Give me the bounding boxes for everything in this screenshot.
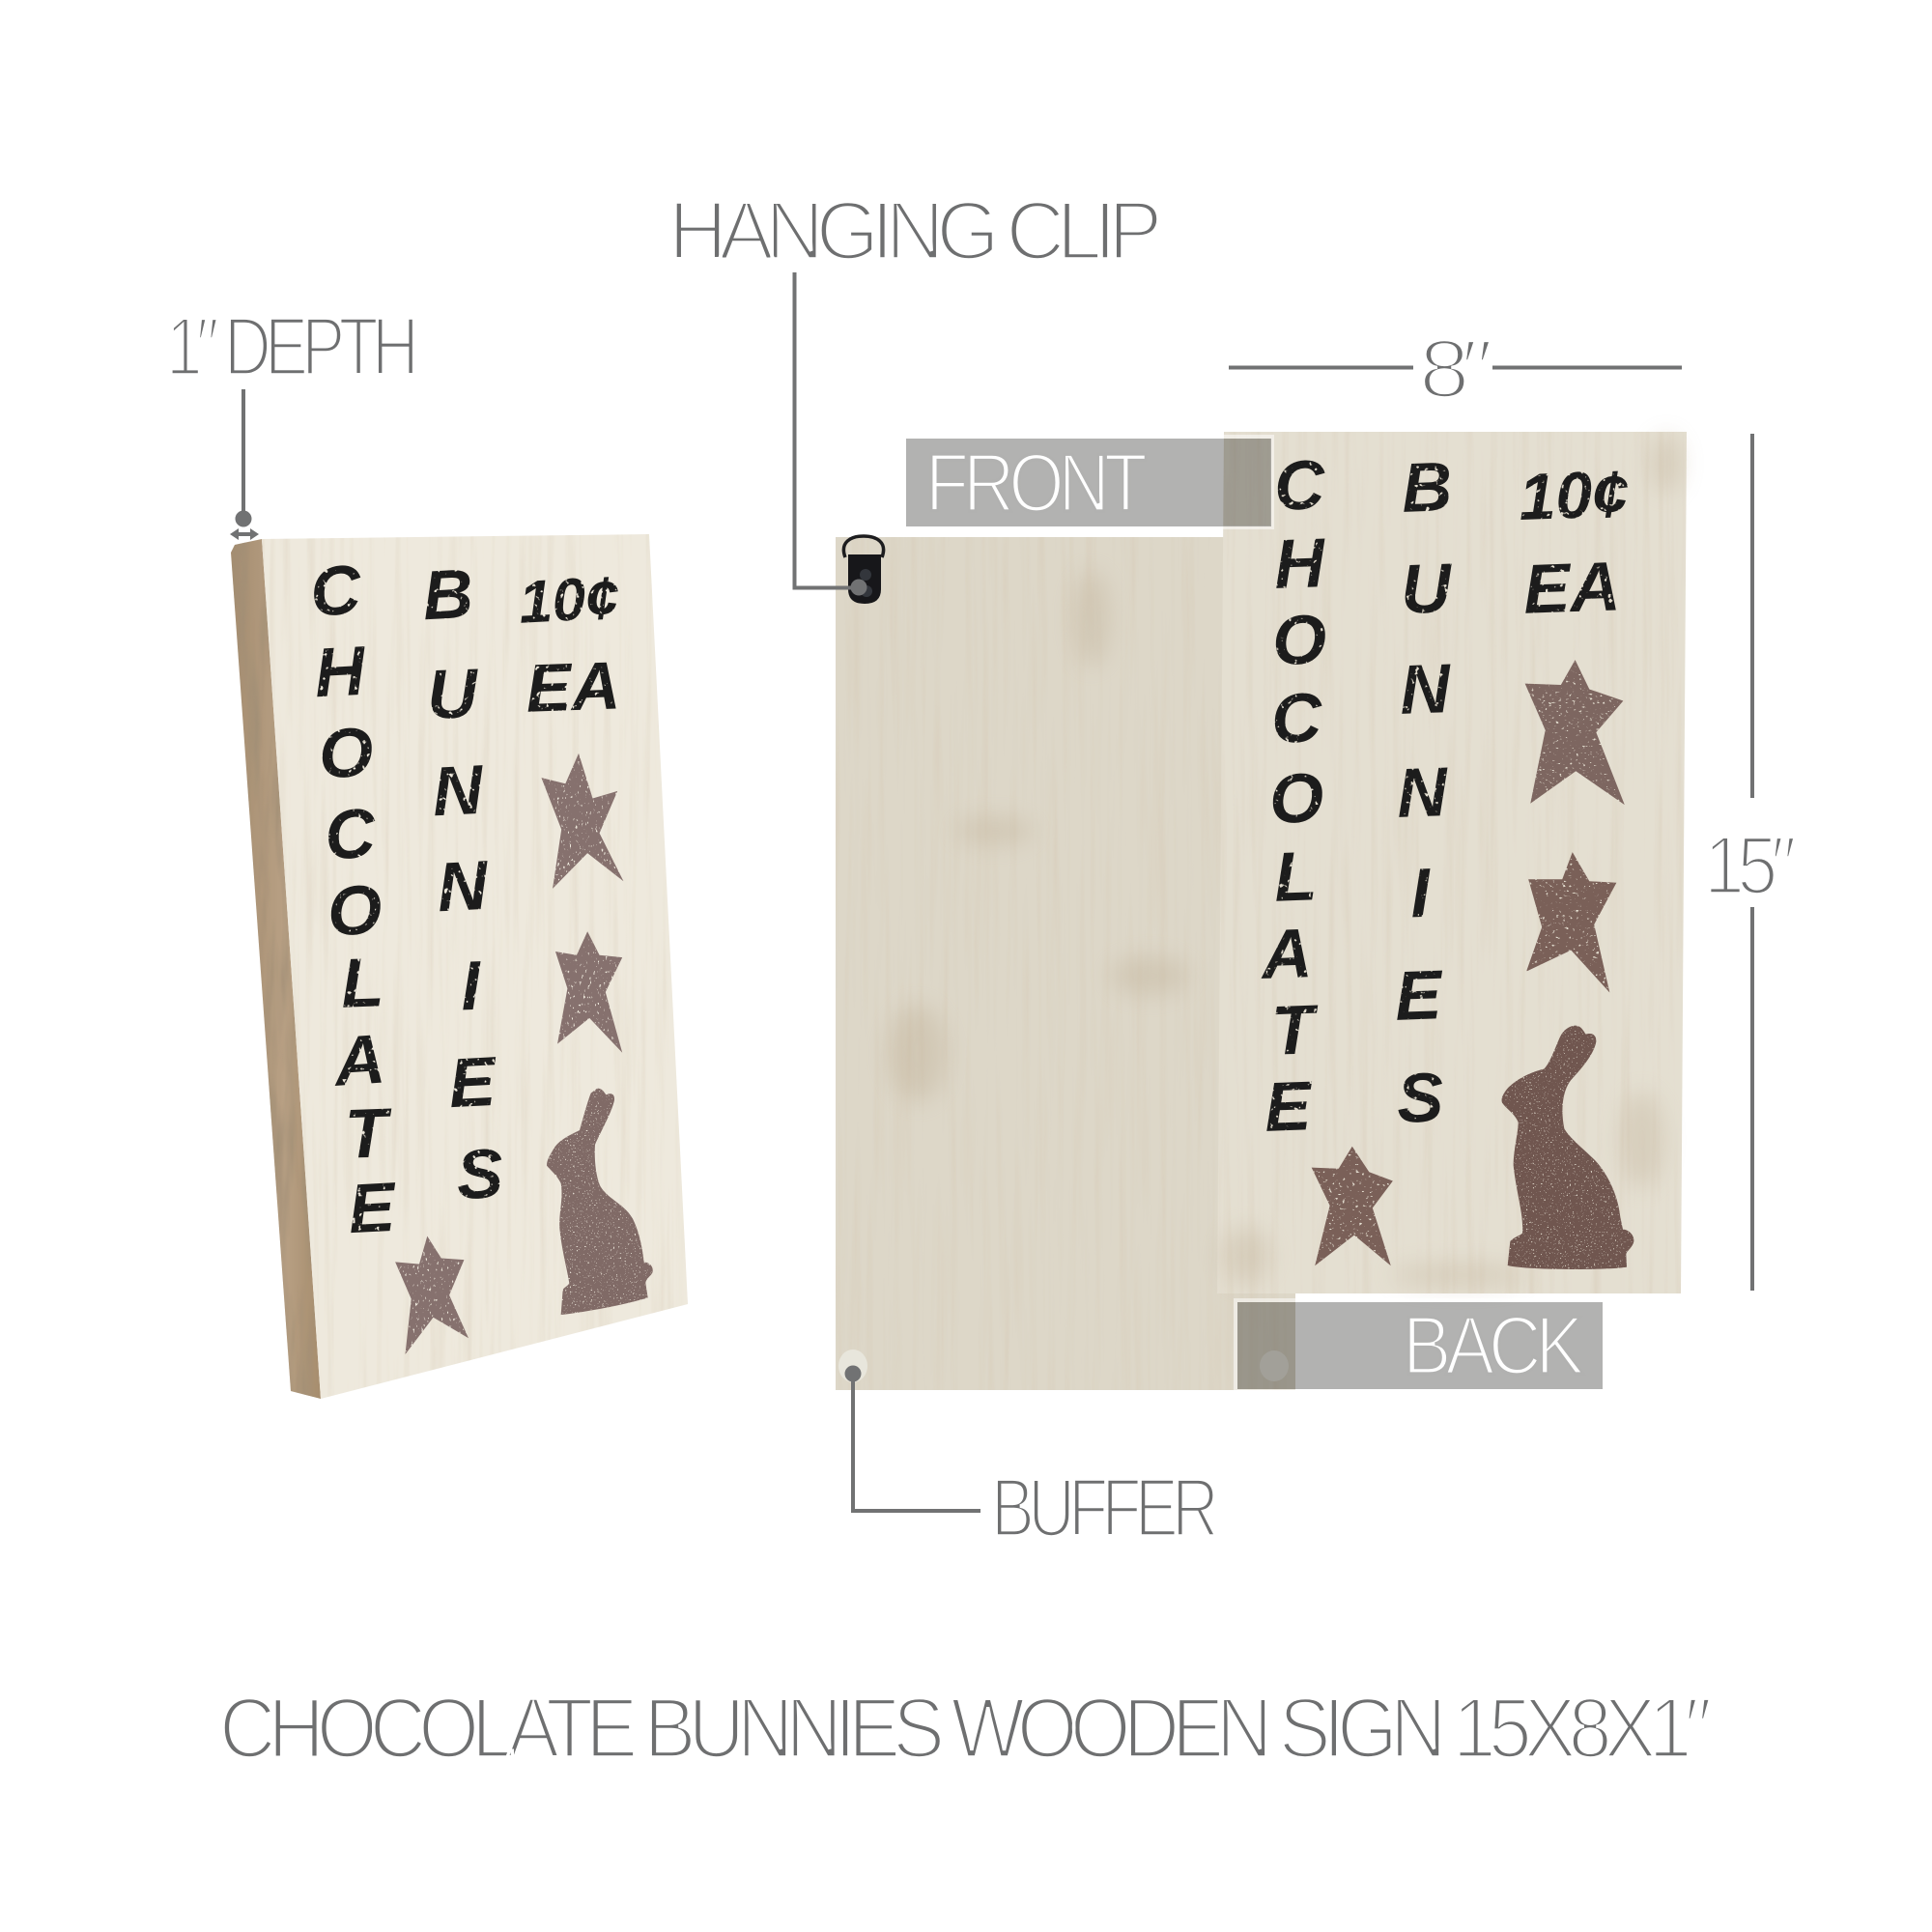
heading: depth: 1″ DEPTH	[166, 301, 414, 393]
label: BACK	[1236, 1300, 1605, 1392]
price: 10 cents each: 10¢	[517, 564, 620, 637]
stars, angled view	[395, 753, 623, 1354]
word: CHOCOLATE: L	[1273, 838, 1319, 917]
heading: hanging clip: HANGING CLIP	[668, 185, 1159, 277]
word: CHOCOLATE: C	[1273, 446, 1327, 526]
icon: right buffer	[1260, 1350, 1289, 1381]
panel: front of sign	[1217, 432, 1687, 1293]
word: CHOCOLATE: L	[340, 944, 385, 1023]
word: BUNNIES: I	[1409, 855, 1434, 932]
label: FRONT	[904, 437, 1272, 529]
word: CHOCOLATE	[1259, 446, 1328, 1147]
dimension: width 8 inches: 8″	[1419, 324, 1492, 415]
sign angled face	[262, 534, 688, 1399]
chocolate bunny silhouette	[1502, 1026, 1634, 1269]
callout: hanging clip leader	[794, 272, 867, 595]
word: CHOCOLATE	[308, 551, 399, 1248]
word: CHOCOLATE: O	[1268, 759, 1325, 838]
label: FRONT: FRONT	[925, 438, 1146, 529]
label: BUFFER: BUFFER	[991, 1463, 1216, 1554]
word: BUNNIES: N	[436, 847, 492, 926]
price: 10 cents each: EA	[525, 647, 621, 726]
price: 10 cents each: 10¢	[1518, 457, 1630, 534]
word: CHOCOLATE: C	[323, 794, 379, 875]
word: BUNNIES	[421, 555, 505, 1214]
word: CHOCOLATE: C	[1270, 679, 1324, 758]
word: BUNNIES: I	[460, 948, 484, 1025]
icon: left buffer	[838, 1350, 867, 1382]
word: BUNNIES: B	[421, 555, 475, 635]
word: CHOCOLATE: O	[327, 871, 384, 951]
word: BUNNIES: S	[1396, 1059, 1445, 1138]
word: BUNNIES: N	[1399, 650, 1454, 729]
word: CHOCOLATE: T	[344, 1094, 395, 1174]
word: BUNNIES	[1394, 448, 1455, 1138]
wear marks on front panel	[1223, 435, 1682, 1287]
word: BUNNIES: E	[447, 1043, 499, 1122]
bunny silhouette, angled view	[547, 1089, 653, 1315]
word: BUNNIES: U	[426, 655, 481, 734]
word: CHOCOLATE: H	[313, 633, 369, 712]
callout: buffer leader	[844, 1366, 980, 1511]
stars: middle and lower	[1312, 852, 1616, 1265]
price: 10 cents each	[1518, 457, 1630, 629]
word: BUNNIES: U	[1400, 550, 1455, 629]
star: upper	[1525, 660, 1625, 805]
word: CHOCOLATE: E	[347, 1169, 399, 1248]
callout: depth pointer with arrow	[230, 389, 259, 540]
word: CHOCOLATE: O	[318, 714, 375, 793]
word: BUNNIES: N	[431, 752, 487, 831]
icon: hanging clip	[843, 536, 884, 604]
word: CHOCOLATE: C	[308, 551, 364, 632]
word: CHOCOLATE: T	[1270, 991, 1321, 1070]
panel: back of sign	[836, 536, 1295, 1390]
label: BACK: BACK	[1403, 1300, 1583, 1392]
sign side edge	[231, 539, 321, 1399]
word: CHOCOLATE: H	[1273, 525, 1328, 604]
wear marks on back panel	[889, 570, 1188, 1101]
word: BUNNIES: B	[1401, 448, 1454, 527]
word: BUNNIES: E	[1394, 956, 1445, 1036]
title: CHOCOLATE BUNNIES WOODEN SIGN 15X8X1″	[219, 1680, 1711, 1776]
word: CHOCOLATE: E	[1264, 1067, 1315, 1147]
dimension: height 15 inches: 15″	[1704, 820, 1796, 912]
word: CHOCOLATE: A	[1259, 915, 1314, 994]
word: CHOCOLATE: A	[330, 1020, 387, 1101]
word: BUNNIES: S	[455, 1135, 505, 1214]
word: CHOCOLATE: O	[1271, 601, 1328, 680]
word: BUNNIES: N	[1396, 753, 1451, 833]
price: 10 cents each	[517, 564, 621, 726]
panel: angled view of sign	[231, 534, 688, 1399]
price: 10 cents each: EA	[1522, 548, 1622, 629]
